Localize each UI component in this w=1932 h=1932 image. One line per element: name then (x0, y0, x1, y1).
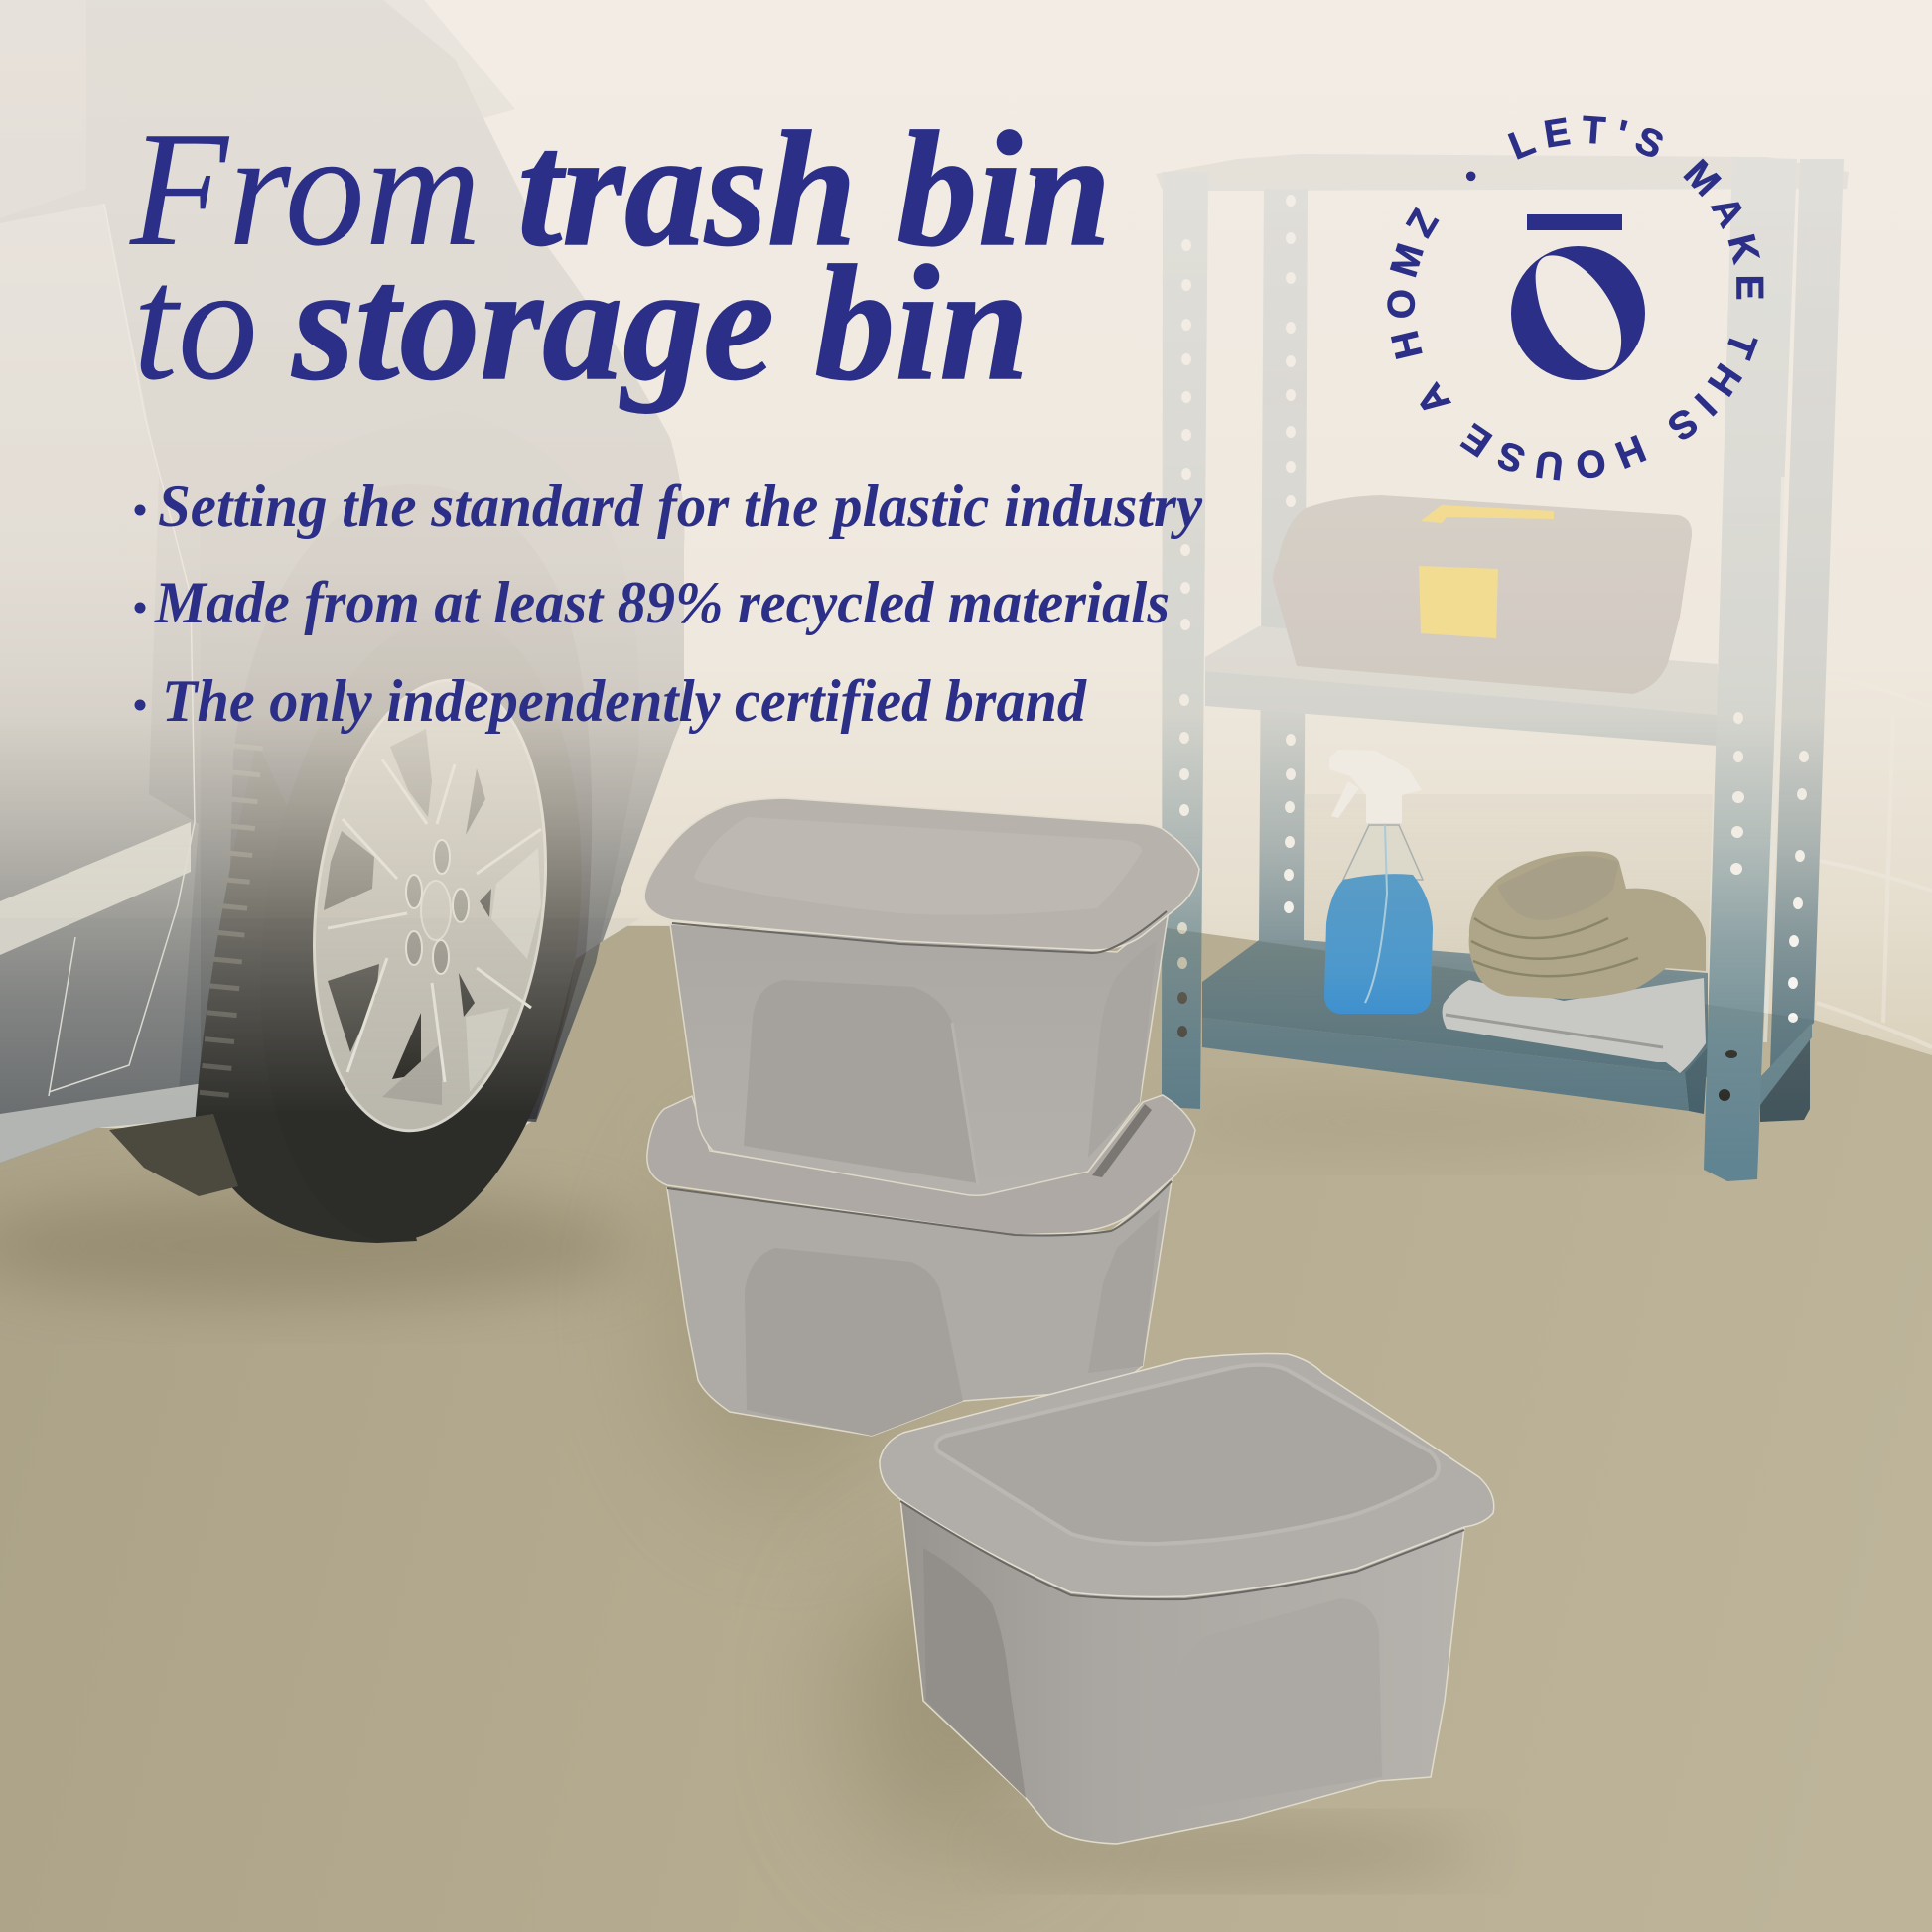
towel fold line (1446, 1015, 1663, 1047)
rim windows (324, 729, 541, 1105)
right post highlight (1765, 477, 1783, 1042)
garage floor (0, 923, 1932, 1932)
wall background (0, 0, 1932, 1092)
blue liquid (1324, 874, 1433, 1014)
stacked storage bins (644, 798, 1494, 1844)
bullet 3: The only independently certified brand (162, 668, 1087, 734)
front bin recess (1163, 1598, 1382, 1812)
lower sill (0, 1083, 213, 1163)
title (129, 98, 1111, 414)
bottom shelf surface (1202, 940, 1708, 1077)
middle bin lid (647, 1095, 1195, 1235)
spray tube (1365, 825, 1387, 1003)
logo macron bar (1527, 214, 1622, 230)
slogan dot (1466, 171, 1475, 181)
right front post (1704, 157, 1797, 1181)
lug holes (406, 840, 469, 974)
front lid underline (900, 1501, 1464, 1599)
title line 2: to storage bin (133, 232, 1029, 414)
car body (0, 0, 684, 1163)
cloth pile (1469, 851, 1706, 999)
top lid underline (672, 911, 1167, 953)
light body crease band (0, 822, 191, 955)
right foot (1760, 1033, 1810, 1122)
shelving unit with fading fog (1156, 154, 1849, 1181)
bottle neck glass (1343, 825, 1423, 880)
front bin lid (880, 1354, 1494, 1596)
floor shadows (0, 1092, 1718, 1875)
rags stack (1443, 851, 1706, 1073)
wheel well (230, 753, 592, 1119)
back wall shade behind shelf bottom (1304, 794, 1713, 978)
front left post (1162, 172, 1208, 1109)
spray bottle (1324, 750, 1433, 1014)
front bin body (900, 1499, 1464, 1844)
front bin side recess (923, 1548, 1026, 1798)
tire (227, 597, 615, 1260)
middle bin side recess (1088, 1209, 1160, 1373)
front lid inner panel (936, 1365, 1439, 1544)
rim spoke highlights (328, 759, 541, 1082)
middle bin body (667, 1181, 1172, 1436)
cloth top (1497, 856, 1619, 920)
top bin lid (644, 798, 1199, 950)
shadow gap between bins (1092, 1104, 1152, 1177)
toolbox handle (1421, 505, 1554, 523)
tread grooves (213, 745, 248, 1102)
top lid inner panel (694, 817, 1142, 915)
top bin side recess (1088, 941, 1157, 1158)
car silhouette haze underlay (0, 918, 640, 1191)
brand badge (1387, 115, 1763, 481)
top bin recess (744, 980, 978, 1183)
wall panel seams (1817, 675, 1932, 1047)
logo letter o (1511, 246, 1645, 380)
middle shelf top (1205, 626, 1718, 715)
post holes (1177, 195, 1809, 1101)
back left post (1259, 189, 1308, 943)
door panel (0, 744, 199, 1114)
bottom shelf side (1685, 1047, 1708, 1114)
wheel rim (290, 667, 570, 1144)
title line 1: From trash bin (129, 98, 1111, 280)
wheel hub (421, 881, 451, 940)
middle shelf front (1205, 671, 1718, 746)
toolbox latch (1419, 566, 1498, 638)
toolbox (1273, 495, 1692, 694)
wheel arch (201, 911, 606, 1122)
right foot bracket (1760, 1023, 1812, 1105)
bottom shelf front (1202, 1018, 1689, 1111)
middle bin recess (745, 1248, 963, 1436)
circular slogan: LET'S MAKE THIS HOUSE A HOMZ (1387, 115, 1763, 481)
under-car shadow (109, 1114, 238, 1196)
windshield area (383, 0, 515, 118)
bullet 1: Setting the standard for the plastic industry (158, 474, 1202, 539)
bullet 2: Made from at least 89% recycled materials (154, 570, 1170, 635)
spray head (1329, 750, 1422, 823)
tire tread side (195, 869, 417, 1243)
cloth folds (1471, 918, 1638, 976)
spray trigger (1331, 781, 1359, 818)
top bin recess highlight (952, 1023, 978, 1185)
top shelf (1156, 154, 1849, 191)
middle lid underline (667, 1181, 1172, 1235)
folded towel (1443, 978, 1706, 1073)
door seams (49, 204, 195, 1096)
bullet list (135, 474, 1202, 734)
top bin body (670, 910, 1169, 1195)
right back post (1770, 159, 1844, 1067)
car with fading fog (0, 0, 684, 1260)
side window frame (0, 0, 86, 218)
